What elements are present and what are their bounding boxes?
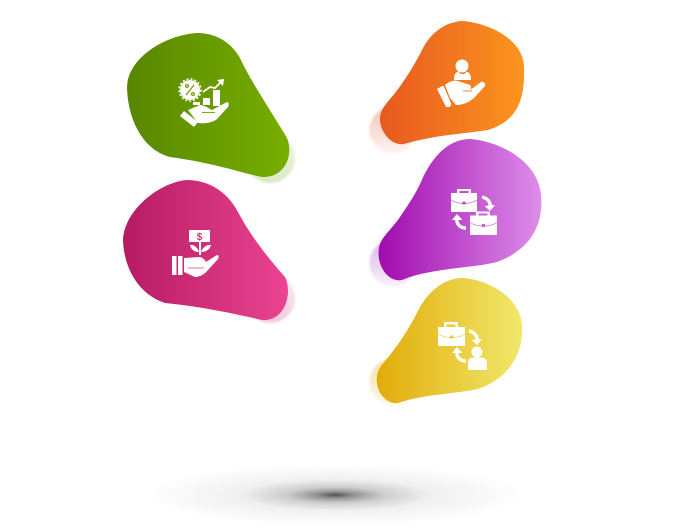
- icon: hand with percent badge and growth chart: [179, 79, 229, 127]
- icon: hand holding person: [437, 60, 485, 107]
- icon: hand holding money plant: $: [197, 232, 203, 243]
- panel: green blob: [127, 33, 295, 183]
- panel: yellow blob: [370, 278, 522, 406]
- panel: purple blob: [370, 139, 541, 286]
- icon: exchange between briefcase and person: [438, 322, 487, 370]
- icon: exchange between briefcases: [451, 189, 497, 235]
- icon: hand holding money plant: [172, 230, 219, 277]
- panel: orange blob: [370, 21, 524, 154]
- panel: pink blob: [123, 180, 295, 323]
- ground shadow: [145, 464, 525, 526]
